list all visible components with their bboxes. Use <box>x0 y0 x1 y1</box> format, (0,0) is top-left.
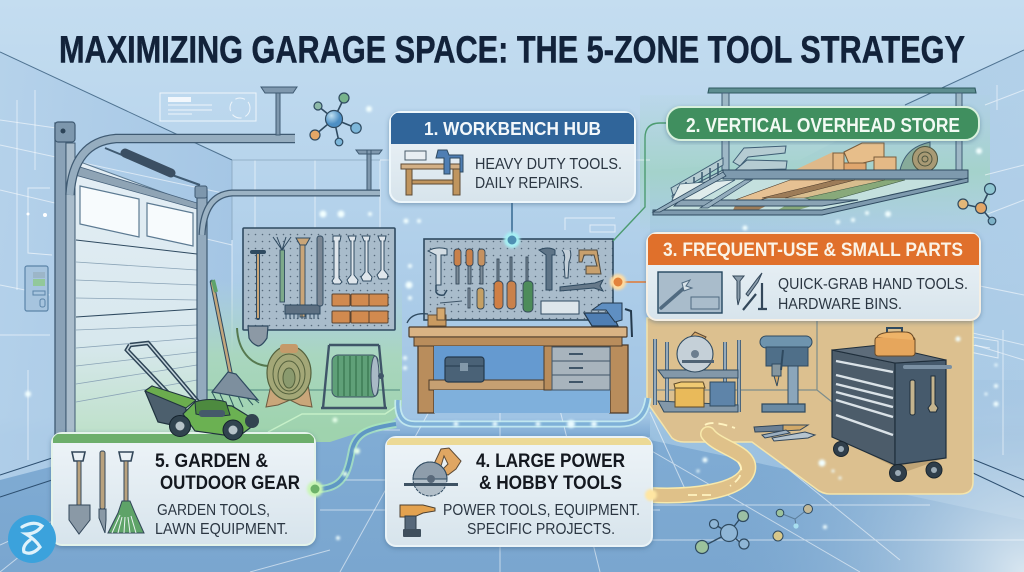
icon: bow rake <box>285 238 320 319</box>
zone back wall band <box>655 320 832 402</box>
icon: leaf rake <box>212 280 259 407</box>
icon: bench vise <box>584 303 632 337</box>
card 4: large power and hobby tools <box>386 437 652 546</box>
glowing particles <box>25 106 998 540</box>
icon: orange toolbox on chest <box>875 328 915 356</box>
icon: molecule top right <box>958 184 996 225</box>
connector: overhead card to pegboard <box>613 123 667 241</box>
drawers <box>552 347 610 390</box>
icon: lawn mower <box>127 343 259 440</box>
logo badge <box>8 515 56 563</box>
icon: shovel <box>248 252 268 346</box>
text: power tools description: SPECIFIC PROJECTS. <box>467 521 615 538</box>
zone: frequent-use floor <box>647 318 973 494</box>
text: frequent-use description: QUICK-GRAB HAND TOOLS. <box>778 276 968 293</box>
icon: hand tools on floor <box>754 425 815 441</box>
connection path: garden <box>315 418 396 489</box>
icon: mini pegboard <box>658 272 722 313</box>
connection path: around bench <box>398 398 648 428</box>
text: workbench description: HEAVY DUTY TOOLS. <box>475 156 622 173</box>
heading: garden: 5. GARDEN & <box>155 451 268 472</box>
card 2: vertical overhead store <box>667 107 979 140</box>
connection path: power tools <box>650 423 748 495</box>
icon: mini workbench <box>401 150 463 195</box>
zone glow: garden floor <box>60 280 402 442</box>
text: garden description: LAWN EQUIPMENT. <box>155 521 288 538</box>
ceiling HUD panel <box>160 93 256 121</box>
icon: garden tools <box>69 451 144 534</box>
icon: molecule bottom <box>696 510 749 554</box>
left garden pegboard <box>243 228 395 346</box>
card 3: frequent-use and small parts <box>647 233 980 320</box>
icon: adjustable wrench <box>436 285 447 295</box>
heading: garden: OUTDOOR GEAR <box>160 473 300 494</box>
icon: screws <box>733 273 767 310</box>
heading: workbench hub: 1. WORKBENCH HUB <box>424 119 601 139</box>
garage door panels <box>67 148 200 438</box>
icon: cordless drill <box>400 505 435 537</box>
icon: garden hose coil <box>237 328 312 407</box>
icon: circular saw <box>404 448 461 496</box>
icon: parts bins <box>332 294 388 323</box>
icon: toolbox <box>445 357 484 382</box>
center pegboard <box>424 239 613 320</box>
icon: clamp <box>579 250 601 274</box>
connector dot: garden <box>307 481 323 497</box>
workbench <box>409 327 628 413</box>
icon: hammer <box>428 248 447 285</box>
icons: wrenches <box>332 236 388 284</box>
icon: hose reel <box>321 345 387 408</box>
heading: large power: & HOBBY TOOLS <box>479 473 622 494</box>
platform <box>655 178 968 212</box>
roll <box>900 142 930 170</box>
icon: long wrench <box>560 280 603 291</box>
connector dot: power tools <box>645 489 657 501</box>
heading: large power: 4. LARGE POWER <box>476 451 625 472</box>
icon: grinder on bench <box>407 301 462 326</box>
icon: shelving unit with circular saw <box>655 332 739 412</box>
connector: workbench card to pegboard <box>504 202 520 248</box>
text: garden description: GARDEN TOOLS, <box>157 502 270 519</box>
icon: mattock <box>317 236 323 306</box>
wall thermostat panel <box>25 266 48 311</box>
lumber <box>795 152 833 170</box>
card 2: vertical overhead store: 2. VERTICAL OVERHEAD STORE <box>686 115 960 137</box>
text: frequent-use description: HARDWARE BINS. <box>778 296 902 313</box>
heading: frequent-use: 3. FREQUENT-USE & SMALL PARTS <box>663 240 963 261</box>
icon: pliers <box>562 250 571 278</box>
ladder <box>671 146 787 202</box>
icon: molecule top left <box>310 93 361 146</box>
icon: small hammer <box>539 248 555 290</box>
icons: screwdrivers <box>454 249 533 312</box>
card 5: garden and outdoor gear <box>52 433 315 545</box>
icon: hand rake <box>273 237 291 302</box>
wall HUD panels <box>26 188 998 358</box>
icon: molecule bottom small <box>773 504 812 541</box>
icon: drill press <box>760 336 812 412</box>
icon: overhead rack <box>653 88 976 215</box>
connector: frequent-use card to pegboard <box>610 274 647 290</box>
icon: rolling tool chest <box>832 328 950 482</box>
text: power tools description: POWER TOOLS, EQUIPMENT. <box>443 502 640 519</box>
card 1: workbench hub <box>390 112 635 202</box>
icon: power strip <box>541 301 579 314</box>
text: workbench description: DAILY REPAIRS. <box>475 175 583 192</box>
garage door frame and rails <box>55 87 382 443</box>
